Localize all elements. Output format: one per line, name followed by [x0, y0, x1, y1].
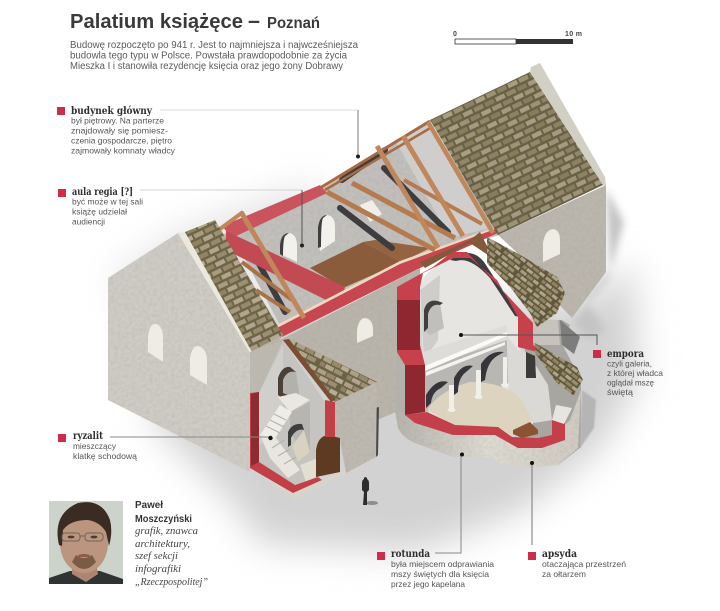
author caption: infografiki: [135, 564, 181, 575]
person silhouette: [362, 477, 378, 505]
red cut wall: [250, 392, 322, 493]
author photo: [49, 501, 123, 584]
right section wall: [498, 185, 606, 318]
red floor diagonal beam: [226, 231, 345, 300]
intro text: [70, 40, 358, 72]
callout: rotunda: mszy świętych dla księcia: [391, 569, 489, 579]
ryzalit interior: [259, 340, 325, 485]
upper niche: [424, 301, 444, 335]
author caption: „Rzeczpospolitej”: [135, 577, 208, 588]
back wall windows: [280, 215, 335, 262]
callout: empora: świętą: [607, 387, 633, 397]
title: –: [248, 8, 260, 33]
drum left side: [396, 345, 408, 425]
callout: aula regia: aula regia [?]: [72, 187, 133, 198]
callout: rotunda: była miejscem odprawiania: [391, 559, 494, 569]
rafters: [220, 122, 493, 318]
callout: budynek główny: czenia gospodarcze, piętro: [71, 136, 172, 146]
ridge rails: [320, 121, 432, 190]
ryzalit door: [316, 435, 340, 477]
rotunda: [395, 232, 596, 468]
author caption: Paweł: [135, 499, 163, 511]
arcade wall: [425, 330, 508, 412]
red front wall top beam: [277, 226, 500, 338]
callout: aula regia: książę udzielał: [72, 206, 127, 216]
callout: apsyda: za ołtarzem: [542, 569, 586, 579]
white gap under the rafters: [360, 200, 382, 222]
building: back wall and floor: [222, 122, 500, 325]
roof trusses and beams: [220, 121, 500, 338]
scale bar: 10 m: [565, 31, 582, 38]
callout: ryzalit: klatkę schodową: [73, 451, 137, 461]
callout: budynek główny: zajmowały komnaty władcy: [71, 146, 176, 156]
conical dome roof: [487, 237, 565, 327]
title: Poznań: [267, 15, 320, 32]
title: [70, 8, 320, 33]
intro text: Mieszka I i stanowiła rezydencję księcia oraz jego żony Dobrawy: [70, 61, 343, 72]
ryzalit plinth: [250, 452, 376, 500]
altar: [513, 422, 538, 438]
long wall window: [357, 318, 373, 343]
lower arch: [288, 424, 304, 447]
ground shadow: [112, 180, 640, 552]
callout: budynek główny: znajdowały się pomiesz-: [71, 126, 168, 136]
red back wall top beam: [222, 185, 327, 238]
callout: budynek główny: był piętrowy. Na parterze: [71, 116, 164, 126]
main left gable wall: [108, 232, 254, 472]
callout: empora: z której władca: [607, 368, 663, 378]
callout: apsyda: [528, 461, 626, 579]
floor: [427, 382, 532, 436]
scale bar: 0: [453, 31, 457, 38]
columns: [448, 357, 509, 412]
rotunda inner wall: [420, 258, 533, 425]
left roof strip: [185, 220, 283, 352]
intro text: Budowę rozpoczęto po 941 r. Jest to najmniejsza i najwcześniejsza: [70, 40, 358, 51]
ryzalit roof: [283, 339, 377, 402]
dark arch under the dome: [450, 253, 520, 317]
scale bar: [453, 31, 582, 44]
dark rafter shadows: [232, 150, 448, 312]
author caption: [135, 499, 208, 588]
author caption: szef sekcji: [135, 551, 178, 562]
callout: aula regia: audiencji: [72, 216, 105, 226]
base stone: [395, 390, 581, 468]
callout: empora: [459, 333, 663, 397]
lower apse roof: [535, 343, 583, 395]
callout: aula regia: [58, 187, 304, 248]
long front wall: [250, 268, 420, 458]
empora slab: [423, 325, 507, 368]
landing and stairs: [278, 393, 310, 412]
ryzalit: [250, 339, 377, 500]
left gable edge: [178, 232, 254, 353]
ryzalit right wall: [335, 382, 377, 473]
rotunda drum right side: [525, 320, 581, 465]
right wall window: [543, 229, 560, 262]
red cut wall: [397, 252, 580, 395]
callout: empora: empora: [607, 349, 644, 360]
callout: budynek główny: budynek główny: [71, 106, 153, 117]
callout: apsyda: apsyda: [542, 549, 577, 560]
shadow strip: [375, 407, 379, 458]
upper arch: [278, 367, 296, 398]
callout: rotunda: rotunda: [391, 549, 430, 560]
arcade arches: [426, 352, 504, 408]
callout: aula regia: być może w tej sali: [72, 196, 143, 206]
apse back wall: [508, 337, 552, 423]
callout: rotunda: przez jego kapelana: [391, 579, 465, 589]
callout: ryzalit: [58, 431, 273, 461]
callout: ryzalit: mieszczący: [73, 441, 117, 451]
left gable windows: [148, 324, 207, 385]
callout: apsyda: otaczająca przestrzeń: [542, 559, 626, 569]
author caption: Moszczyński: [135, 513, 192, 525]
wooden floor: [310, 242, 402, 288]
callout: empora: oglądał mszę: [607, 378, 654, 388]
dome roof beam: [420, 232, 495, 268]
author caption: architektury,: [135, 539, 190, 550]
callout: rotunda: [377, 452, 494, 589]
wooden cross beams: [242, 180, 482, 312]
callout: empora: czyli galeria,: [607, 358, 652, 368]
callout: ryzalit: ryzalit: [73, 431, 103, 442]
right section roof: [430, 63, 606, 235]
gable edge: [530, 63, 606, 186]
callout: budynek główny: [57, 106, 360, 158]
intro text: budowla tego typu w Polsce. Powstała prawdopodobnie za życia: [70, 50, 347, 62]
title: Palatium książęce: [70, 10, 243, 33]
author caption: grafik, znawca: [135, 526, 198, 537]
